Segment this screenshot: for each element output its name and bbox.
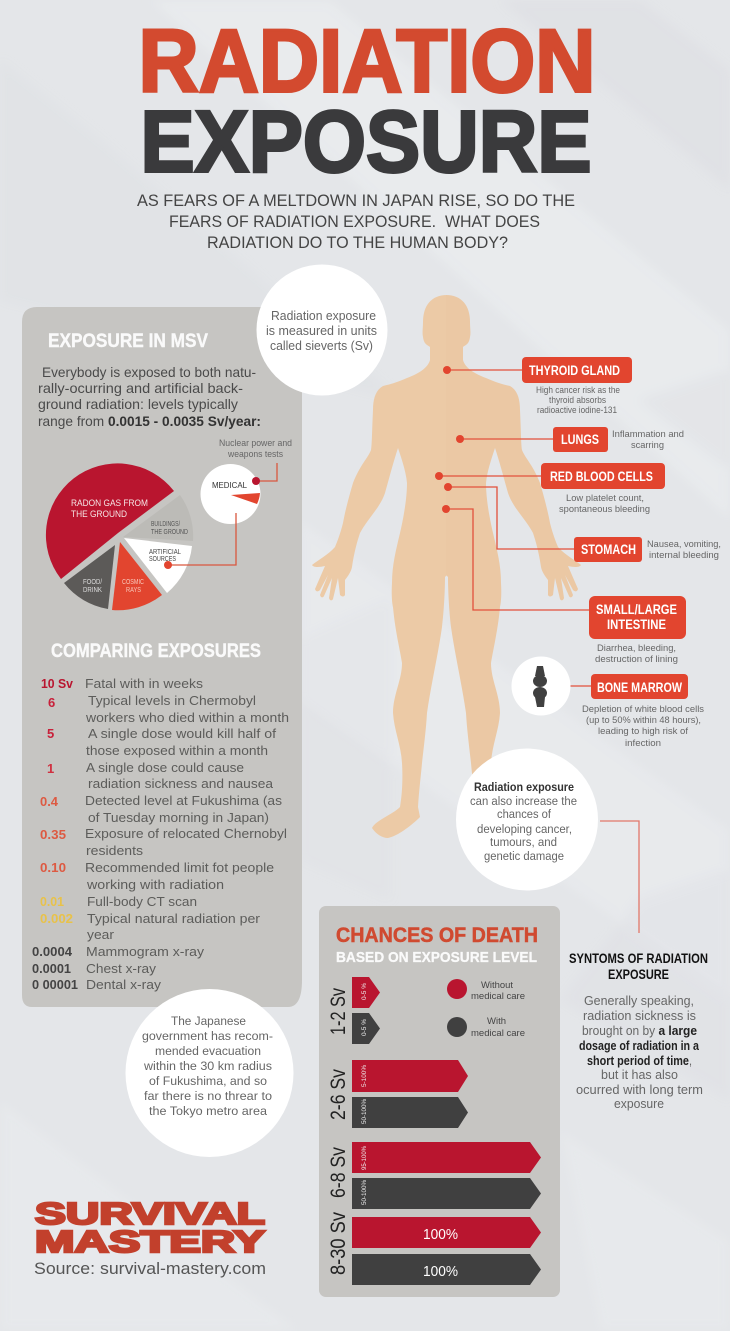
exposure comparison list: Fatal with in weeks xyxy=(85,676,204,691)
symptoms paragraph: exposure xyxy=(614,1097,664,1111)
exposure comparison list: A single dose would kill half of xyxy=(88,726,276,741)
legend: medical care xyxy=(471,991,525,1002)
callout: japanese government: far there is no threar to xyxy=(144,1089,272,1103)
exposure comparison list: Full-body CT scan xyxy=(87,894,197,909)
label: small/large intestine xyxy=(442,505,686,665)
callout: cancer risk: tumours, and xyxy=(490,835,557,849)
exposure comparison list: those exposed within a month xyxy=(86,743,268,758)
exposure comparison list: working with radiation xyxy=(86,877,224,892)
logo: survival mastery: MASTERY xyxy=(35,1225,265,1259)
heading: exposure in msv: EXPOSURE IN MSV xyxy=(48,330,208,352)
bar group: 1-2 Sv: 0-5 % xyxy=(361,983,368,1000)
exposure comparison list: Typical natural radiation per xyxy=(87,911,261,926)
legend xyxy=(447,979,525,1039)
intro paragraph: Everybody is exposed to both natu- xyxy=(42,364,256,380)
exposure comparison list: 0.4 xyxy=(40,794,59,809)
exposure comparison list: A single dose could cause xyxy=(86,760,244,775)
callout: sieverts: is measured in units xyxy=(266,324,377,338)
bar group: 6-8 Sv xyxy=(327,1142,541,1209)
exposure comparison list xyxy=(32,676,289,992)
exposure comparison list: 0.01 xyxy=(40,894,64,909)
legend: Without xyxy=(481,980,513,991)
label: red blood cells: RED BLOOD CELLS xyxy=(550,469,653,484)
note: nuclear power: Nuclear power and xyxy=(219,438,292,449)
label: stomach: Nausea, vomiting, xyxy=(647,539,721,550)
note: nuclear power: weapons tests xyxy=(227,449,283,460)
label: lungs: Inflammation and xyxy=(612,429,684,440)
callout: sieverts: Radiation exposure xyxy=(271,309,376,323)
icon: bone joint xyxy=(533,666,547,707)
title: EXPOSURE xyxy=(140,94,592,190)
pie chart: radiation sources: FOOD/ xyxy=(83,579,102,586)
exposure comparison list: Recommended limit fot people xyxy=(85,860,274,875)
label: bone marrow: BONE MARROW xyxy=(597,680,682,695)
callout: cancer risk: chances of xyxy=(497,807,552,821)
symptoms paragraph: radiation sickness is xyxy=(583,1009,696,1023)
callout: japanese government: within the 30 km radius xyxy=(143,1059,272,1073)
exposure comparison list: residents xyxy=(86,843,144,858)
panel: exposure in msv and comparing exposures xyxy=(22,307,302,1007)
bar group: 1-2 Sv xyxy=(327,977,380,1044)
label: stomach xyxy=(444,483,721,562)
label: lungs xyxy=(456,427,684,452)
label: red blood cells xyxy=(435,463,665,515)
heading: chances of death: BASED ON EXPOSURE LEVEL xyxy=(336,949,537,966)
callout: sieverts: called sieverts (Sv) xyxy=(270,339,373,353)
exposure comparison list: 0.0004 xyxy=(32,944,73,959)
label: thyroid gland: THYROID GLAND xyxy=(529,363,620,378)
heading: chances of death: CHANCES OF DEATH xyxy=(336,924,538,947)
bar group: 8-30 Sv xyxy=(327,1212,541,1285)
intro paragraph: ground radiation: levels typically xyxy=(38,396,238,412)
bar group: 2-6 Sv xyxy=(327,1060,468,1128)
title: RADIATION xyxy=(138,10,596,110)
pie chart: radiation sources: RADON GAS FROM xyxy=(71,498,148,509)
pie chart: radiation sources: SOURCES xyxy=(149,556,176,563)
label: stomach: STOMACH xyxy=(581,542,636,557)
callout: sieverts xyxy=(256,264,388,396)
note: nuclear power xyxy=(219,438,292,460)
bar group: 1-2 Sv: 0-5 % xyxy=(361,1019,368,1036)
pie chart: radiation sources: ARTIFICIAL xyxy=(149,549,181,556)
symptoms paragraph: brought on by a large xyxy=(582,1024,697,1038)
label: red blood cells: spontaneous bleeding xyxy=(559,504,650,515)
label: bone marrow: Depletion of white blood cells xyxy=(582,704,704,715)
exposure comparison list: radiation sickness and nausea xyxy=(88,776,274,791)
heading: symptoms xyxy=(569,951,708,982)
label: thyroid gland: High cancer risk as the xyxy=(536,385,620,396)
exposure comparison list: 1 xyxy=(47,761,54,776)
label: bone marrow xyxy=(512,656,704,749)
exposure comparison list: Dental x-ray xyxy=(86,977,162,992)
human body silhouette xyxy=(312,295,581,838)
bar group: 8-30 Sv: 100% xyxy=(423,1264,458,1280)
subtitle xyxy=(137,191,575,252)
pie chart: radiation sources: DRINK xyxy=(83,587,102,594)
legend: With xyxy=(487,1016,506,1027)
exposure comparison list: 5 xyxy=(47,726,54,741)
label: lungs: LUNGS xyxy=(561,432,599,447)
medical breakdown pie xyxy=(164,463,277,569)
bar group: 2-6 Sv: 2-6 Sv xyxy=(327,1069,350,1120)
symptoms paragraph: ocurred with long term xyxy=(576,1083,703,1097)
label: red blood cells: Low platelet count, xyxy=(566,493,644,504)
legend: medical care xyxy=(471,1028,525,1039)
bar group: 1-2 Sv: 1-2 Sv xyxy=(327,988,350,1035)
exposure comparison list: 6 xyxy=(48,695,55,710)
pie chart: radiation sources: RAYS xyxy=(126,587,141,594)
label: bone marrow: infection xyxy=(625,738,661,749)
subtitle: AS FEARS OF A MELTDOWN IN JAPAN RISE, SO DO THE xyxy=(137,191,575,210)
pie chart: radiation sources: THE GROUND xyxy=(151,529,188,536)
logo: survival mastery: SURVIVAL xyxy=(35,1197,265,1231)
exposure comparison list: 0.35 xyxy=(40,827,66,842)
bar group: 2-6 Sv: 50-100% xyxy=(361,1099,368,1124)
label: small/large intestine: INTESTINE xyxy=(607,617,666,632)
bar group: 8-30 Sv: 8-30 Sv xyxy=(327,1212,350,1275)
exposure comparison list: 10 Sv xyxy=(41,676,74,691)
label: small/large intestine: SMALL/LARGE xyxy=(596,602,677,617)
exposure comparison list: Typical levels in Chermobyl xyxy=(88,693,256,708)
exposure comparison list: 0.10 xyxy=(40,860,66,875)
intro paragraph xyxy=(38,364,261,429)
pie chart: radiation sources: BUILDINGS/ xyxy=(151,521,180,528)
label: lungs: scarring xyxy=(631,440,664,451)
subtitle: RADIATION DO TO THE HUMAN BODY? xyxy=(207,233,508,252)
exposure comparison list: workers who died within a month xyxy=(85,710,289,725)
callout: cancer risk: can also increase the xyxy=(470,794,577,808)
callout: japanese government: the Tokyo metro area xyxy=(149,1104,267,1118)
label: thyroid gland: thyroid absorbs xyxy=(549,395,606,406)
symptoms paragraph: short period of time, xyxy=(587,1054,692,1068)
exposure comparison list: 0 00001 xyxy=(32,977,78,992)
callout: japanese government: government has recom- xyxy=(142,1029,273,1043)
callout: japanese government: of Fukushima, and so xyxy=(149,1074,267,1088)
symptoms paragraph xyxy=(576,994,703,1111)
label: bone marrow: (up to 50% within 48 hours), xyxy=(586,715,701,726)
heading: symptoms: EXPOSURE xyxy=(608,967,669,982)
exposure comparison list: Exposure of relocated Chernobyl xyxy=(85,826,287,841)
callout: japanese government xyxy=(126,989,294,1157)
bar group: 6-8 Sv: 50-100% xyxy=(361,1180,368,1205)
exposure comparison list: 0.0001 xyxy=(32,961,71,976)
source: Source: survival-mastery.com xyxy=(34,1260,266,1278)
label: small/large intestine: destruction of lining xyxy=(595,654,678,665)
exposure comparison list: Mammogram x-ray xyxy=(86,944,205,959)
heading: comparing exposures: COMPARING EXPOSURES xyxy=(51,640,261,662)
intro paragraph: range from 0.0015 - 0.0035 Sv/year: xyxy=(38,413,261,429)
bar group: 6-8 Sv: 95-100% xyxy=(361,1146,368,1170)
medical breakdown pie: MEDICAL xyxy=(212,480,247,490)
callout: cancer risk: developing cancer, xyxy=(477,822,572,836)
arrow: callout to symptoms xyxy=(600,821,639,933)
callout: cancer risk xyxy=(456,748,598,890)
panel: chances of death xyxy=(319,906,560,1297)
pie chart: radiation sources: THE GROUND xyxy=(71,509,127,520)
logo: survival mastery xyxy=(35,1197,265,1259)
bar group: 8-30 Sv: 100% xyxy=(423,1227,458,1243)
bar group: 2-6 Sv: 5-100% xyxy=(361,1065,368,1087)
label: small/large intestine: Diarrhea, bleeding, xyxy=(597,643,676,654)
pie chart: radiation sources: COSMIC xyxy=(122,579,144,586)
exposure comparison list: Chest x-ray xyxy=(86,961,157,976)
exposure comparison list: Detected level at Fukushima (as xyxy=(85,793,283,808)
exposure comparison list: of Tuesday morning in Japan) xyxy=(88,810,269,825)
symptoms paragraph: dosage of radiation in a xyxy=(579,1039,700,1053)
callout: japanese government: mended evacuation xyxy=(155,1044,261,1058)
title xyxy=(138,10,596,190)
callout: japanese government: The Japanese xyxy=(171,1014,246,1028)
exposure comparison list: year xyxy=(87,927,115,942)
label: bone marrow: leading to high risk of xyxy=(598,726,688,737)
symptoms paragraph: Generally speaking, xyxy=(584,994,694,1008)
heading: chances of death xyxy=(336,924,538,966)
exposure comparison list: 0.002 xyxy=(40,911,73,926)
callout: cancer risk: genetic damage xyxy=(484,849,564,863)
bar group: 6-8 Sv: 6-8 Sv xyxy=(327,1147,350,1198)
subtitle: FEARS OF RADIATION EXPOSURE. WHAT DOES xyxy=(169,212,540,231)
symptoms paragraph: but it has also xyxy=(601,1068,678,1082)
intro paragraph: rally-ocurring and artificial back- xyxy=(38,380,243,396)
label: stomach: internal bleeding xyxy=(649,550,719,561)
label: thyroid gland xyxy=(443,357,632,416)
label: thyroid gland: radioactive iodine-131 xyxy=(537,405,617,416)
callout: cancer risk: Radiation exposure xyxy=(474,780,574,794)
pie chart: radiation sources xyxy=(46,463,193,610)
